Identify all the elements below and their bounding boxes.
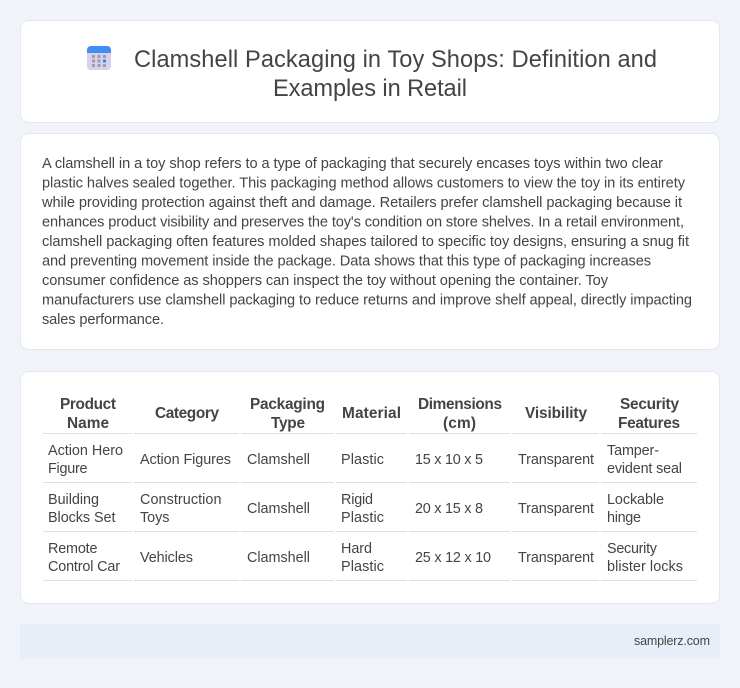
text block: clamshell description: manufacturers use clamshell packaging to reduce returns and improve shelf appeal, directly impacting: [42, 292, 692, 308]
table row: Action Hero Figure: Plastic: [341, 452, 384, 468]
table row: Remote Control Car: Vehicles: [140, 550, 193, 566]
table row: Building Blocks Set: Plastic: [341, 510, 384, 526]
table row: Action Hero Figure: Transparent: [518, 452, 594, 468]
table header row: Features: [618, 415, 680, 432]
table row: Building Blocks Set: [48, 492, 664, 526]
footer: [20, 624, 720, 658]
table row: Building Blocks Set: Blocks Set: [48, 510, 116, 526]
table row: Action Hero Figure: Clamshell: [247, 452, 310, 468]
table row: Action Hero Figure: 15 x 10 x 5: [415, 452, 483, 468]
table row: Remote Control Car: Remote: [48, 541, 98, 557]
table header row: Security: [620, 396, 679, 413]
table row: Remote Control Car: blister locks: [607, 559, 683, 575]
text block: clamshell description: plastic halves sealed together. This packaging method allows customers to view the toy in its entirety: [42, 176, 686, 192]
text block: clamshell description: while providing protection against theft and damage. Retailers prefer clamshell packaging because it: [41, 195, 682, 211]
text block: clamshell description: enhances product visibility and preserves the toy's condition on store shelves. In a retail environment,: [42, 214, 684, 230]
table row: Action Hero Figure: Figure: [48, 461, 88, 477]
table row: Building Blocks Set: Clamshell: [247, 501, 310, 517]
title: Examples in Retail: [273, 76, 467, 102]
title: [134, 47, 657, 102]
table header row: Name: [67, 415, 109, 432]
panel: description: [20, 134, 720, 350]
table header row: Product: [60, 396, 116, 413]
icon: calendar: [87, 46, 111, 70]
table row: Building Blocks Set: Building: [48, 492, 99, 508]
table header row: Category: [155, 405, 219, 422]
footer text: samplerz.com: [634, 634, 710, 648]
table row: Remote Control Car: Clamshell: [247, 550, 310, 566]
table header row: Dimensions: [418, 396, 502, 413]
text block: clamshell description: consumer confidence as shoppers can inspect the toy without opening the container. Toy: [42, 273, 609, 289]
table header row: Visibility: [525, 405, 587, 422]
table row: Remote Control Car: [48, 541, 683, 575]
table row: Building Blocks Set: Construction: [140, 492, 222, 508]
table row: Action Hero Figure: Action Hero: [48, 443, 123, 459]
table header row: [60, 396, 680, 432]
table row: Building Blocks Set: Transparent: [518, 501, 594, 517]
text block: clamshell description: A clamshell in a toy shop refers to a type of packaging that securely encases toys within two clear: [42, 156, 663, 172]
table row: Remote Control Car: Security: [607, 541, 658, 557]
table row: Building Blocks Set: Lockable: [607, 492, 664, 508]
table row: Remote Control Car: Hard: [341, 541, 372, 557]
table row: Remote Control Car: Transparent: [518, 550, 594, 566]
table header row: Material: [342, 405, 401, 422]
table row: Remote Control Car: Plastic: [341, 559, 384, 575]
table row: Building Blocks Set: 20 x 15 x 8: [415, 501, 483, 517]
table row: Action Hero Figure: evident seal: [607, 461, 682, 477]
table row: Action Hero Figure: [48, 443, 682, 477]
table row: Action Hero Figure: Action Figures: [140, 452, 231, 468]
table row: Remote Control Car: Control Car: [48, 559, 120, 575]
panel: title header: [20, 20, 720, 122]
text block: clamshell description: clamshell packaging often features molded shapes tailored to specific toy designs, ensuring a snug fit: [42, 234, 689, 250]
table header row: Type: [271, 415, 305, 432]
text block: clamshell description: sales performance.: [42, 312, 164, 328]
table row: Building Blocks Set: Toys: [140, 510, 170, 526]
table header row: Packaging: [250, 396, 325, 413]
table row: Action Hero Figure: Tamper-: [607, 443, 659, 459]
text block: clamshell description: and preventing movement inside the package. Data shows that this type of packaging increases: [42, 254, 651, 270]
text block: clamshell description: [41, 156, 692, 328]
table header row: (cm): [443, 415, 476, 432]
table row: Remote Control Car: 25 x 12 x 10: [415, 550, 491, 566]
table row: Building Blocks Set: hinge: [607, 510, 641, 526]
table row: Building Blocks Set: Rigid: [341, 492, 373, 508]
title: Clamshell Packaging in Toy Shops: Definition and: [134, 47, 657, 73]
panel: product table: [20, 372, 720, 604]
